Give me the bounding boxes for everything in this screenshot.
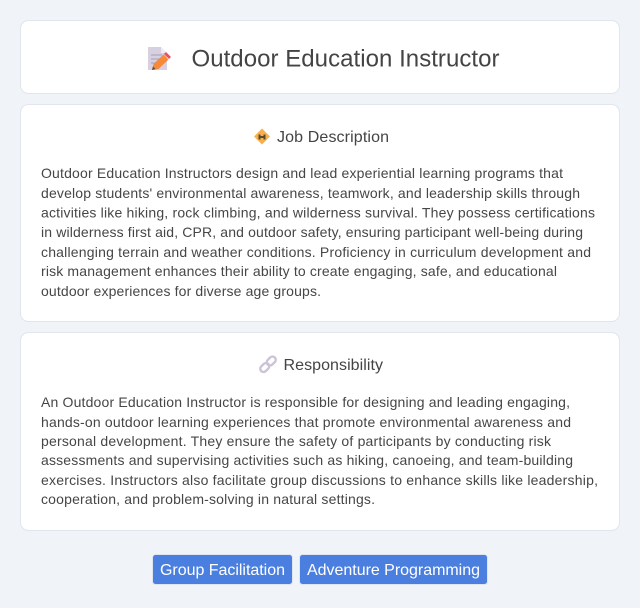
text block: job description: outdoor experiences for diverse age groups.: [41, 283, 321, 299]
text block: job description: [41, 165, 595, 299]
icon: document with pencil: [148, 47, 171, 70]
text block: responsibility: assessments and supervising activities such as hiking, canoeing, and team-building: [41, 452, 573, 468]
panel: responsibility: [20, 332, 620, 530]
text block: responsibility: hands-on outdoor learning experiences that promote environmental awareness and: [41, 414, 571, 430]
text block: job description: develop students' environmental awareness, teamwork, and leadership skills through: [41, 185, 580, 201]
tag: adventure programming: Adventure Programming: [307, 562, 480, 579]
text block: job description: risk management enhances their ability to create engaging, safe, and educational: [41, 263, 557, 279]
title: Outdoor Education Instructor: [192, 46, 500, 72]
text block: job description: challenging terrain and weather conditions. Proficiency in curriculum development and: [41, 244, 591, 260]
text block: responsibility: personal development. They ensure the safety of participants by conducting risk: [41, 433, 552, 449]
tag: adventure programming: [300, 554, 488, 584]
text block: responsibility: [41, 394, 598, 507]
tag: group facilitation: Group Facilitation: [160, 562, 285, 579]
text block: responsibility: exercises. Instructors also facilitate group discussions to enhance skills like leadership,: [41, 472, 598, 488]
heading: job description: Job Description: [277, 129, 389, 146]
heading: responsibility: Responsibility: [284, 357, 383, 374]
icon: road sign: [254, 128, 270, 144]
text block: job description: Outdoor Education Instructors design and lead experiential learning programs that: [41, 165, 563, 181]
icon: chain link: [259, 355, 277, 373]
panel: title: [20, 20, 620, 94]
panel: job description: [20, 104, 620, 322]
text block: job description: activities like hiking, rock climbing, and wilderness survival. They possess certifications: [41, 204, 595, 220]
text block: responsibility: cooperation, and problem-solving in natural settings.: [41, 491, 375, 507]
text block: job description: in wilderness first aid, CPR, and outdoor safety, ensuring participant well-being during: [41, 224, 583, 240]
tag: group facilitation: [152, 554, 292, 584]
text block: responsibility: An Outdoor Education Instructor is responsible for designing and leading engaging,: [41, 394, 570, 410]
